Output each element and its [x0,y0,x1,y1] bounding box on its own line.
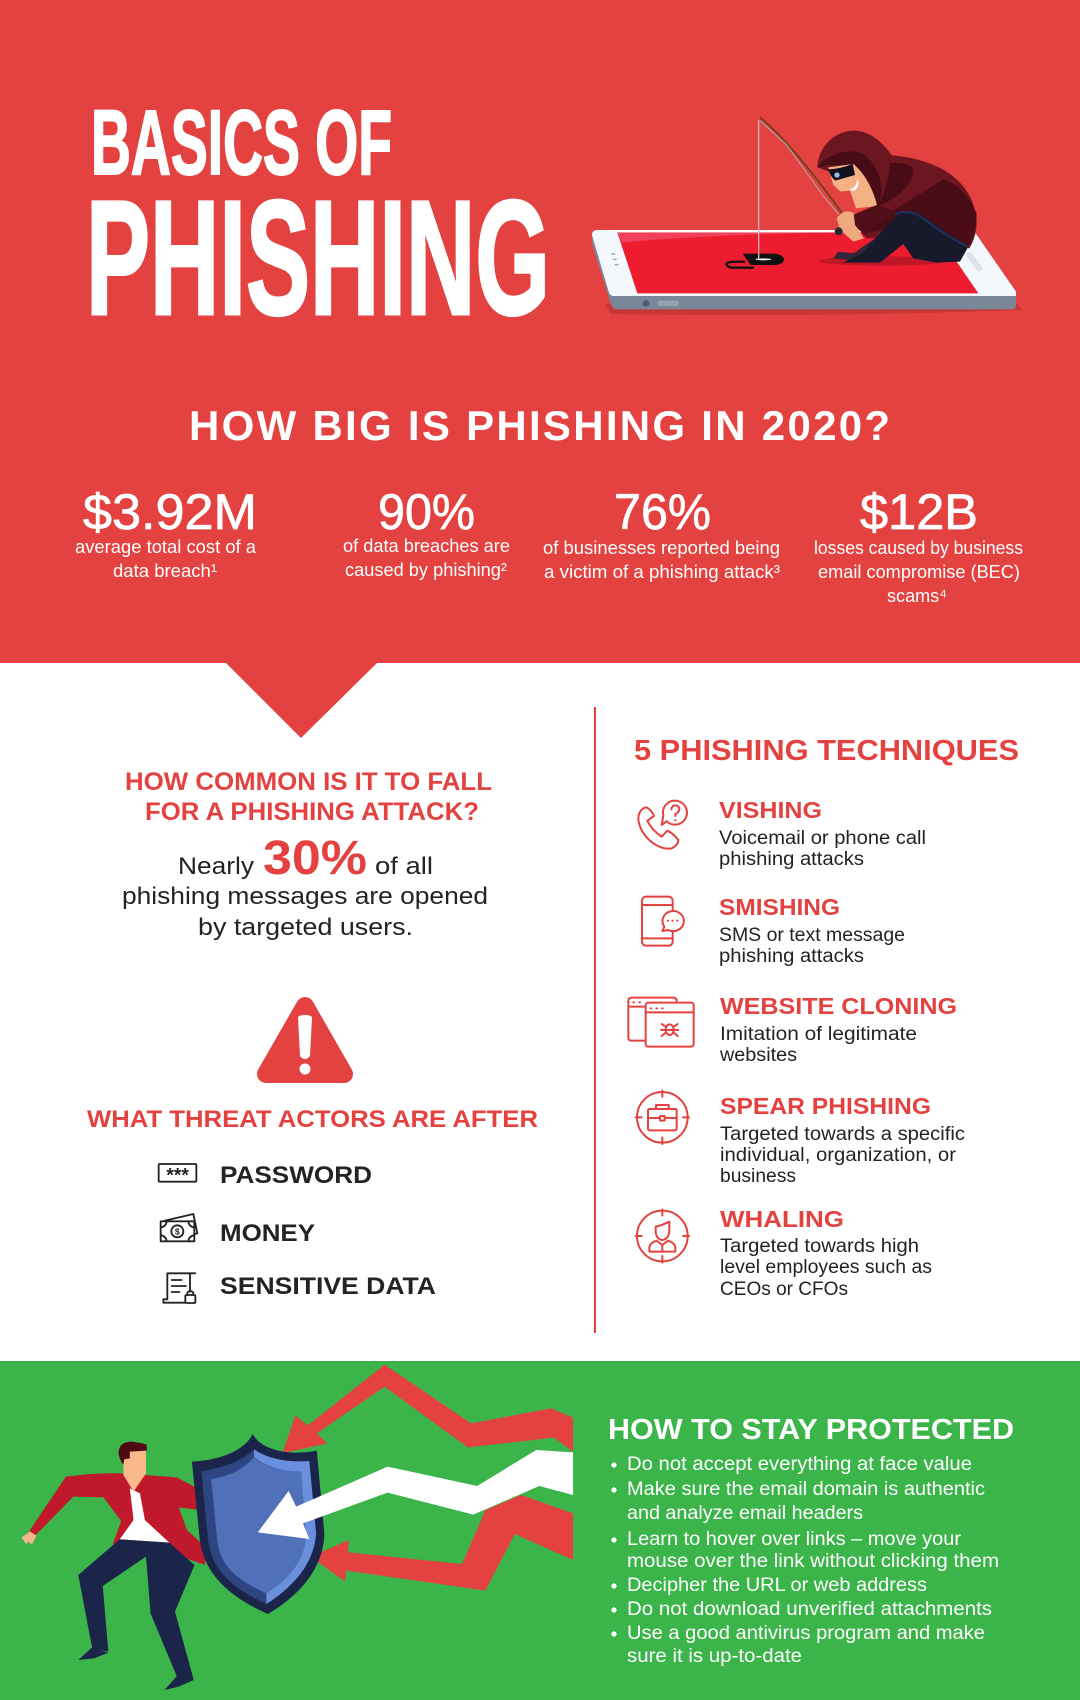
list: protection tips: Do not accept everything at face value [627,1454,972,1475]
stat: breaches caused by phishing: of data breaches are [343,535,510,556]
stat: BEC losses: email compromise (BEC) [818,561,1020,582]
label: sensitive data: SENSITIVE DATA [220,1273,436,1300]
shield [192,1434,324,1614]
text: 30 percent opened: 30% [263,832,367,885]
list: protection tips [611,1454,999,1667]
heading: how common: FOR A PHISHING ATTACK? [145,798,479,826]
technique: website cloning: WEBSITE CLONING [720,993,957,1019]
stat: average cost: data breach¹ [113,560,217,581]
icon: warning triangle [266,1006,344,1074]
stat: businesses victim: 76% [614,484,711,540]
panel: red header [0,0,1080,738]
text: 30 percent opened: Nearly [178,853,254,880]
red arrow bottom [311,1495,573,1591]
illustration: man with shield deflecting arrows [21,1365,573,1690]
text: 30 percent opened: of all [375,853,433,880]
technique: website cloning [628,993,957,1066]
technique: vishing: VISHING [719,797,822,823]
list: protection tips: sure it is up-to-date [627,1646,802,1667]
stat: BEC losses: $12B [860,484,978,540]
red arrow top [282,1365,573,1453]
technique: smishing: phishing attacks [719,946,864,967]
technique: smishing: SMS or text message [719,925,905,946]
technique: spear phishing [636,1091,965,1187]
stat: BEC losses: scams⁴ [887,585,947,606]
stat: breaches caused by phishing [343,484,510,580]
heading: what threat actors are after: WHAT THREAT ACTORS ARE AFTER [87,1106,538,1133]
list: protection tips: Make sure the email domain is authentic [627,1479,985,1500]
technique: whaling: level employees such as [720,1257,932,1278]
technique: spear phishing: Targeted towards a specific [720,1124,965,1145]
technique: smishing: SMISHING [719,894,840,920]
stat: breaches caused by phishing: 90% [378,484,475,540]
list: protection tips: Learn to hover over links – move your [627,1529,962,1550]
technique: whaling: WHALING [720,1206,844,1232]
stat: businesses victim: of businesses reported being [543,537,780,558]
man [21,1442,205,1690]
stat: businesses victim [543,484,780,582]
icon: money: $ [175,1227,180,1237]
technique: vishing [638,797,926,870]
heading: how big is phishing: HOW BIG IS PHISHING IN 2020? [189,402,890,449]
technique: website cloning: Imitation of legitimate [720,1024,917,1045]
stat: average cost [75,484,257,581]
white arrow [258,1450,573,1539]
illustration: hacker fishing on a phone [592,117,1022,315]
text: 30 percent opened: phishing messages are opened [122,883,488,910]
icon: password [159,1164,196,1186]
technique: whaling: CEOs or CFOs [720,1279,848,1300]
icon: sensitive data [163,1273,195,1303]
heading: how to stay protected: HOW TO STAY PROTECTED [608,1414,1014,1446]
icon: target briefcase [636,1091,689,1144]
heading: how common: HOW COMMON IS IT TO FALL [125,768,492,796]
icon: phone with chat [642,897,684,946]
divider [594,707,596,1333]
icon: phone with question [638,801,687,849]
title: PHISHING [86,166,550,349]
icon: money [161,1214,197,1241]
technique: spear phishing: business [720,1166,796,1187]
stat: average cost: $3.92M [83,484,257,540]
technique: vishing: Voicemail or phone call [719,828,926,849]
technique: spear phishing: SPEAR PHISHING [720,1093,931,1119]
heading: 5 phishing techniques: 5 PHISHING TECHNIQUES [634,735,1019,767]
text: 30 percent opened [122,832,488,941]
icon: target executive [636,1209,689,1263]
icon: password: *** [166,1165,189,1186]
technique: website cloning: websites [719,1045,797,1066]
text: 30 percent opened: by targeted users. [198,914,413,941]
stat: businesses victim: a victim of a phishing attack³ [544,561,780,582]
technique: spear phishing: individual, organization, or [720,1145,957,1166]
list: protection tips: and analyze email headers [627,1503,863,1524]
list: protection tips: mouse over the link without clicking them [627,1551,999,1572]
list: protection tips: Use a good antivirus program and make [627,1623,985,1644]
heading: how common [125,768,492,826]
title: BASICS OF [91,92,392,194]
padlock [727,120,784,268]
list: protection tips: Decipher the URL or web address [627,1575,927,1596]
panel: green protection band [0,1361,1080,1700]
stat: BEC losses [814,484,1023,606]
stat: breaches caused by phishing: caused by phishing² [345,559,507,580]
list: protection tips: Do not download unverified attachments [627,1599,992,1620]
label: password: PASSWORD [220,1162,372,1189]
technique: whaling: Targeted towards high [720,1236,919,1257]
label: money: MONEY [220,1220,315,1247]
stat: average cost: average total cost of a [75,536,257,557]
technique: vishing: phishing attacks [719,849,864,870]
technique: whaling [636,1206,932,1300]
stat: BEC losses: losses caused by business [814,537,1023,558]
phone [592,230,1022,315]
icon: browser windows with bug [628,998,694,1047]
title [86,92,550,349]
hacker [760,117,977,266]
technique: smishing [642,894,905,967]
